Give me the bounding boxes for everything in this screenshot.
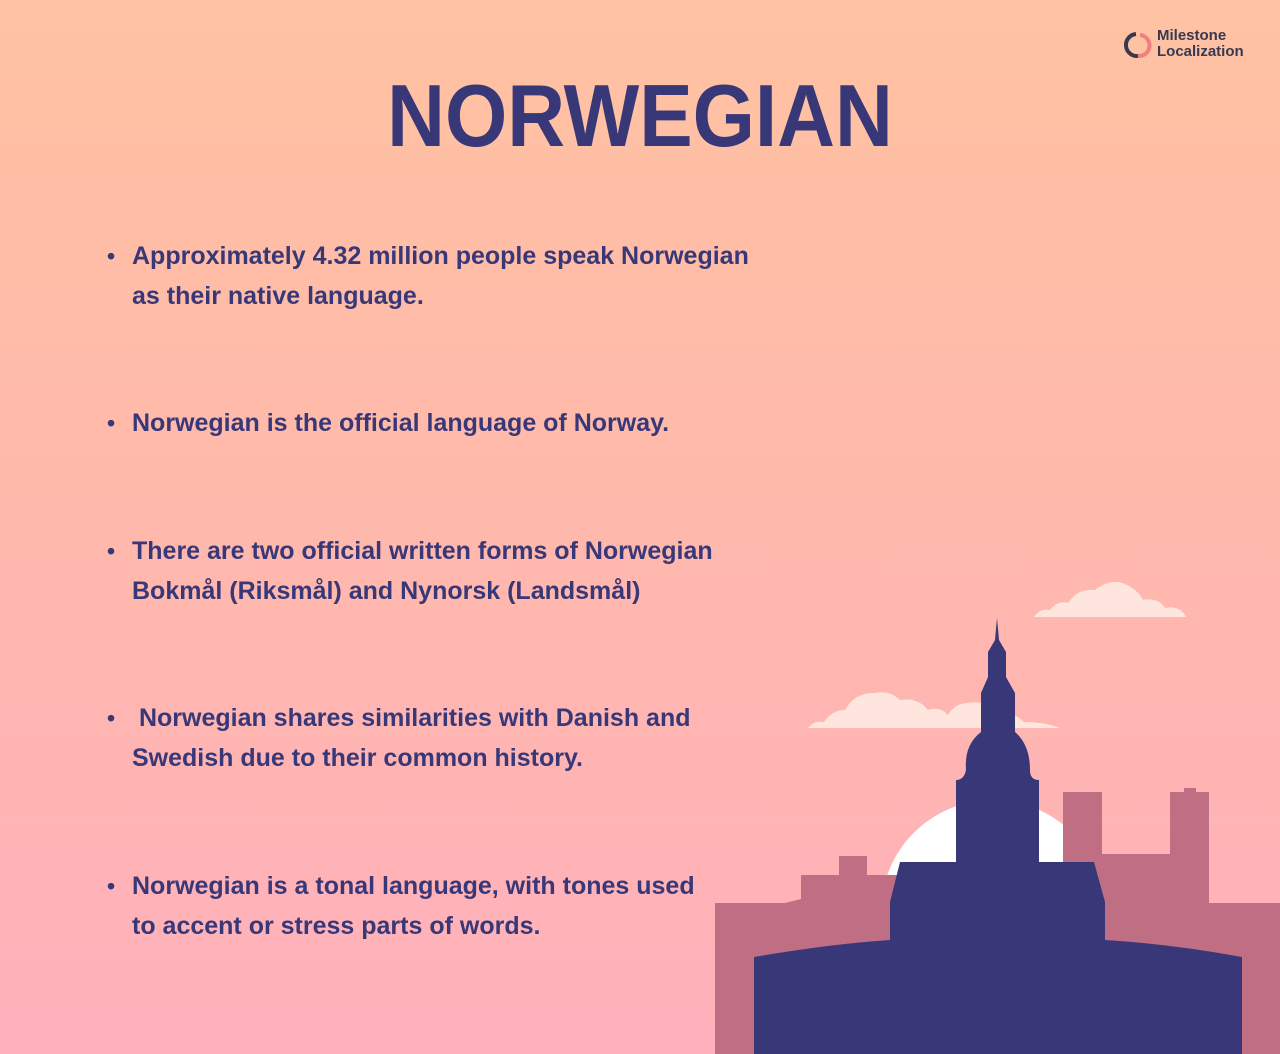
bullet 3: There are two official written forms of Norwegian xyxy=(132,537,713,565)
bullet 4: Norwegian shares similarities with Danish and xyxy=(139,704,690,732)
bullet 5: Norwegian is a tonal language, with tones used xyxy=(132,872,695,900)
bullet 5: • xyxy=(107,873,115,899)
bullet 2: • xyxy=(107,410,115,436)
logo text: Milestone xyxy=(1157,27,1226,44)
church silhouette xyxy=(754,618,1242,1054)
bullet 1: Approximately 4.32 million people speak Norwegian xyxy=(132,242,749,270)
title: NORWEGIAN xyxy=(387,66,893,165)
sun xyxy=(881,800,1105,1024)
icon: logo ring xyxy=(1124,32,1152,58)
bullet 3: • xyxy=(107,538,115,564)
bullet 5: to accent or stress parts of words. xyxy=(132,912,540,940)
bullet 1 xyxy=(107,242,749,310)
bullet 4: • xyxy=(107,705,115,731)
cloud top xyxy=(1034,582,1186,617)
cloud middle xyxy=(808,692,1060,728)
logo text: Localization xyxy=(1157,43,1244,60)
bullet 2: Norwegian is the official language of Norway. xyxy=(132,409,669,437)
background buildings xyxy=(715,788,1280,1054)
logo xyxy=(1124,27,1244,60)
bullet 5 xyxy=(107,872,695,940)
bullet 3: Bokmål (Riksmål) and Nynorsk (Landsmål) xyxy=(132,577,640,605)
bullet 1: as their native language. xyxy=(132,282,424,310)
bullet 4 xyxy=(107,704,690,772)
bullet 4: Swedish due to their common history. xyxy=(132,744,583,772)
logo text xyxy=(1157,27,1244,60)
bullet 1: • xyxy=(107,243,115,269)
bullet 3 xyxy=(107,537,713,605)
